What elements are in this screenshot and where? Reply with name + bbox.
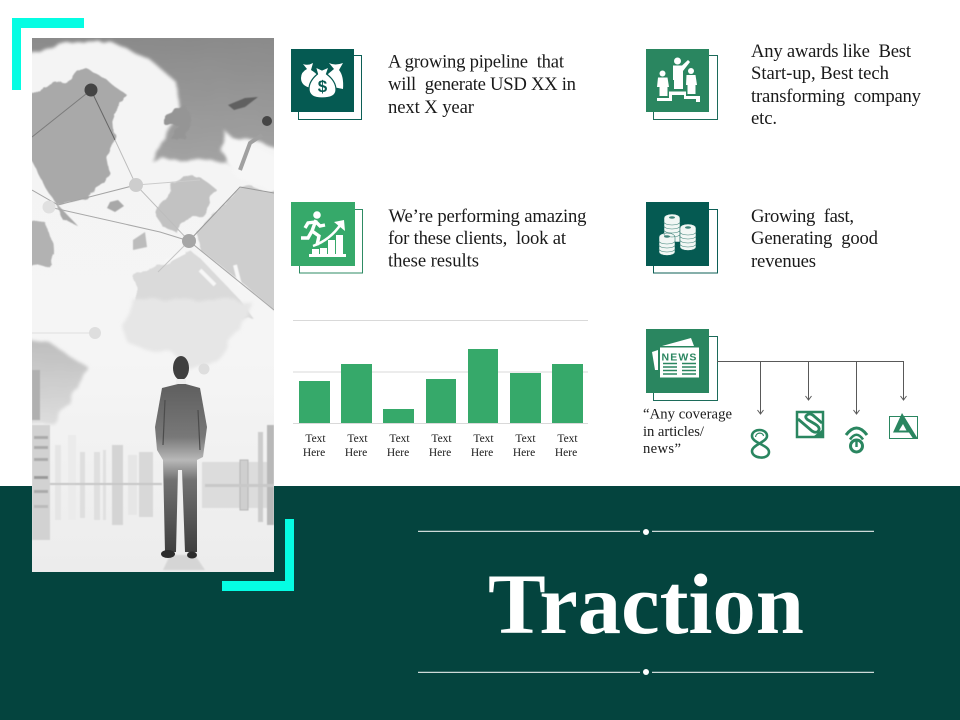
text: awards: Any awards like Best [751,41,912,62]
text: pipeline [388,52,577,118]
bar chart [293,320,588,459]
text: pipeline: will generate USD XX in [388,74,577,95]
top-left teal bracket [12,18,84,90]
bottom ornament line [418,669,874,675]
text: revenues: revenues [751,251,816,272]
text: coverage quote [643,406,732,457]
icon: wifi power logo [846,428,867,452]
title block [418,529,874,675]
bar chart: Here [555,447,577,459]
bar chart: Text [389,433,410,445]
bar chart: Here [513,447,535,459]
icon: people on podium [646,49,718,120]
bar chart: Text [515,433,536,445]
text: awards: transforming company [751,86,922,107]
text: coverage quote: in articles/ [643,424,705,440]
panel: revenues [646,202,879,273]
text: pipeline: next X year [388,97,475,118]
bar chart: Text [305,433,326,445]
icon: runner on rising bars [291,202,362,273]
bar chart: Text [473,433,494,445]
text: pipeline: A growing pipeline that [388,52,565,72]
text: coverage quote: news” [643,441,681,457]
title: Traction [488,556,804,652]
icon: triangle logo [890,413,918,439]
bar chart: Text [431,433,452,445]
text: awards: Start-up, Best tech [751,63,890,84]
text: clients results [388,206,586,272]
text: coverage quote: “Any coverage [643,406,732,422]
text: revenues [751,206,879,272]
icon: S square logo [797,412,823,437]
bar chart: Here [471,447,493,459]
bar chart: Text [557,433,578,445]
text: clients results: these results [388,250,479,272]
icon: newspaper: NEWS [662,352,697,364]
man standing [155,356,207,558]
text: revenues: Growing fast, [751,206,854,227]
panel: pipeline [291,49,577,120]
text: awards: etc. [751,108,777,129]
icon: figure-eight logo [752,430,769,458]
bar chart: Text [347,433,368,445]
bar chart: Here [303,447,325,459]
bar chart: Here [429,447,451,459]
bar chart: Here [345,447,367,459]
dark title band [0,486,960,720]
bottom-right teal bracket [222,519,294,591]
text: clients results: for these clients, look at [388,228,567,249]
icon: money bags [291,49,362,120]
photo: businessman looking at world map and city [32,38,274,572]
bar chart: Here [387,447,409,459]
icon: money bags: $ [318,77,328,96]
panel: awards [646,41,922,129]
panel: clients results [291,202,586,273]
top ornament line [418,529,874,535]
icon: newspaper [646,329,718,400]
text: revenues: Generating good [751,228,879,249]
text: clients results: We’re performing amazing [388,206,586,227]
icon: coin stacks [646,202,718,273]
text: awards [751,41,922,129]
connector arrows [717,362,906,414]
